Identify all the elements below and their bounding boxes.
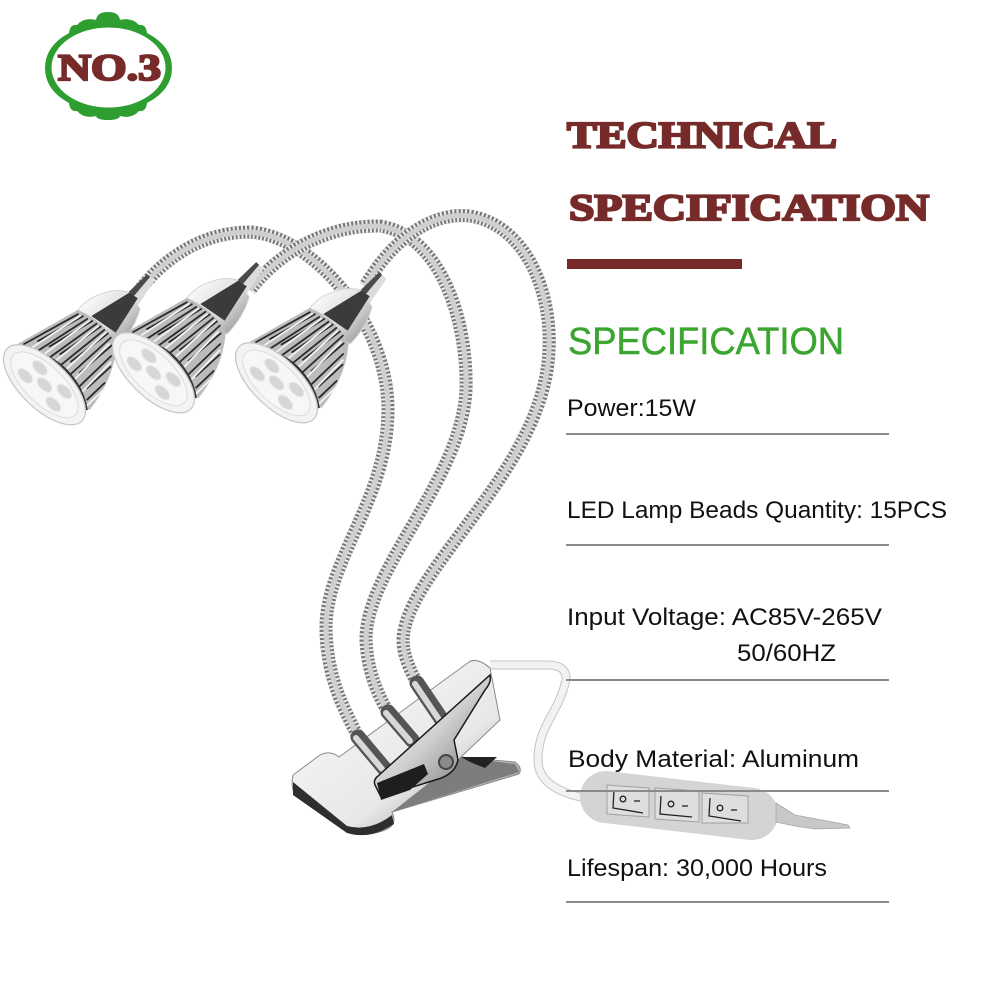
badge: NO.3	[45, 12, 172, 120]
spec: voltage	[566, 604, 889, 681]
neck collars	[356, 683, 442, 769]
spec: beads: LED Lamp Beads Quantity: 15PCS	[567, 497, 947, 524]
gooseneck arm middle	[250, 226, 466, 712]
spec: power: Power:15W	[567, 395, 697, 422]
spec: material: Body Material: Aluminum	[568, 746, 859, 773]
cable	[490, 665, 585, 798]
badge: NO.3: NO.3	[58, 48, 161, 89]
spec: lifespan: Lifespan: 30,000 Hours	[567, 855, 827, 882]
rocker switches	[607, 785, 748, 823]
output cord	[776, 803, 850, 829]
heading: technical specification: TECHNICAL	[567, 116, 837, 156]
clip	[292, 660, 520, 835]
spec: voltage: Input Voltage: AC85V-265V	[567, 604, 883, 631]
heading: technical specification: SPECIFICATION	[569, 188, 929, 229]
clip lever	[374, 675, 490, 797]
spec: voltage: 50/60HZ	[737, 640, 836, 667]
lamp head right	[222, 238, 419, 436]
lamp head middle	[99, 228, 296, 426]
gooseneck arm right	[365, 216, 549, 683]
lamp head left	[0, 240, 187, 438]
heading underline bar	[567, 259, 742, 269]
subheading: specification: SPECIFICATION	[568, 321, 844, 363]
switch box	[606, 785, 850, 829]
clip back plate	[292, 660, 520, 835]
gooseneck arm left	[135, 232, 388, 737]
heading: technical specification	[567, 116, 929, 229]
clip pivot	[439, 755, 453, 769]
